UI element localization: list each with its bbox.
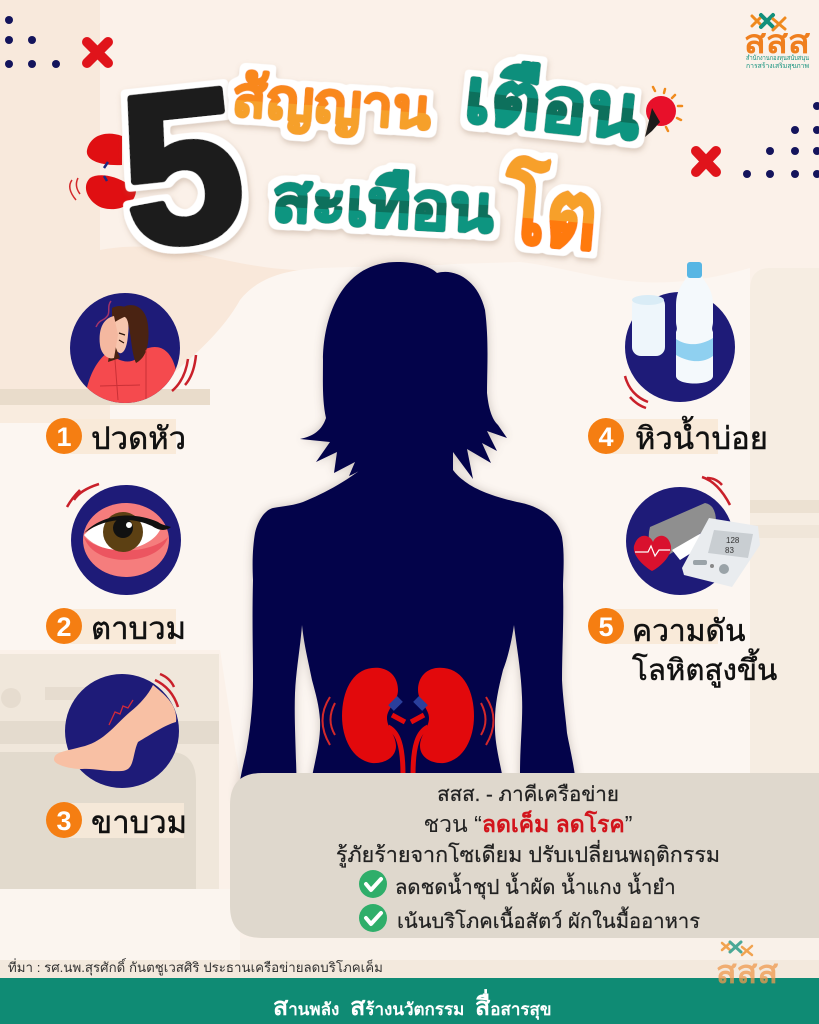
- campaign line: ชวน “ลดเค็ม ลดโรค”: [424, 809, 632, 837]
- item 1: label: 1: [56, 422, 72, 452]
- item 5: label: โลหิตสูงขึ้น: [632, 649, 777, 688]
- check item 2: เน้นบริโภคเนื้อสัตว์ ผักในมื้ออาหาร: [397, 906, 700, 933]
- logo: สสส top right: การสร้างเสริมสุขภาพ: [746, 62, 809, 70]
- title word: เตือน: เตือน: [461, 53, 645, 156]
- item 2: swollen eye icon: [67, 484, 181, 595]
- silhouette shadow: [237, 262, 578, 800]
- red cross top right: [696, 151, 716, 172]
- footer bar: [0, 978, 819, 1024]
- check item 1: ลดชดน้ำชุป น้ำผัด น้ำแกง น้ำยำ: [395, 872, 676, 900]
- item 5: blood pressure monitor icon: 83: [725, 546, 734, 555]
- panel: advice: [230, 773, 819, 938]
- item 5: blood pressure monitor icon: 128: [726, 536, 740, 545]
- item 2: label: 2: [56, 612, 72, 642]
- item 5: label: 5: [598, 612, 614, 642]
- footer bar: สานพลัง สร้างนวัตกรรม สื่อสารสุข: [273, 989, 552, 1021]
- title word: สัญญาน: สัญญาน: [230, 64, 433, 143]
- title word: สะเทือน: สะเทือน: [270, 160, 496, 246]
- item 4: water bottle and glass icon: [625, 262, 735, 408]
- red cross top left: [87, 42, 108, 63]
- title word: โต: โต: [499, 154, 602, 269]
- item 3: label: [46, 802, 187, 840]
- panel heading: สสส. - ภาคีเครือข่าย: [437, 783, 619, 806]
- item 4: label: หิวน้ำบ่อย: [635, 416, 768, 456]
- dot pattern top left: [5, 16, 60, 68]
- icon: kidney beside title: [70, 134, 136, 209]
- item 5: label: ความดัน: [632, 615, 746, 648]
- item 5: blood pressure monitor icon: [626, 477, 760, 595]
- source text: ที่มา : รศ.นพ.สุรศักดิ์ กันตชูเวสศิริ ประธานเครือข่ายลดบริโภคเค็ม: [8, 957, 383, 976]
- item 2: label: [46, 608, 186, 646]
- check item 2: [359, 904, 700, 933]
- item 5: label: [588, 608, 777, 688]
- logo: faded สสส bottom right: สสส: [716, 954, 778, 990]
- item 1: label: [46, 418, 186, 456]
- item 3: swollen leg icon: [54, 674, 179, 788]
- item 3: label: 3: [56, 806, 72, 836]
- title: สัญญาน เตือน สะเทือนไต: [230, 53, 645, 269]
- item 4: label: 4: [598, 422, 614, 452]
- title number 5: 5: [110, 41, 254, 293]
- item 1: headache icon: [70, 293, 196, 403]
- kidneys illustration: [322, 668, 494, 775]
- icon: alarm light beside title: [645, 87, 682, 137]
- silhouette of woman: [237, 262, 578, 800]
- dot pattern top right: [743, 102, 819, 178]
- check item 1: [359, 870, 676, 900]
- item 3: label: ขาบวม: [91, 805, 187, 840]
- advice line: รู้ภัยร้ายจากโซเดียม ปรับเปลี่ยนพฤติกรรม: [336, 840, 720, 868]
- item 2: label: ตาบวม: [91, 611, 186, 646]
- item 4: label: [588, 416, 768, 456]
- logo: สสส top right: [744, 15, 811, 70]
- item 1: label: ปวดหัว: [91, 421, 186, 456]
- logo: สสส top right: สสส: [744, 23, 811, 60]
